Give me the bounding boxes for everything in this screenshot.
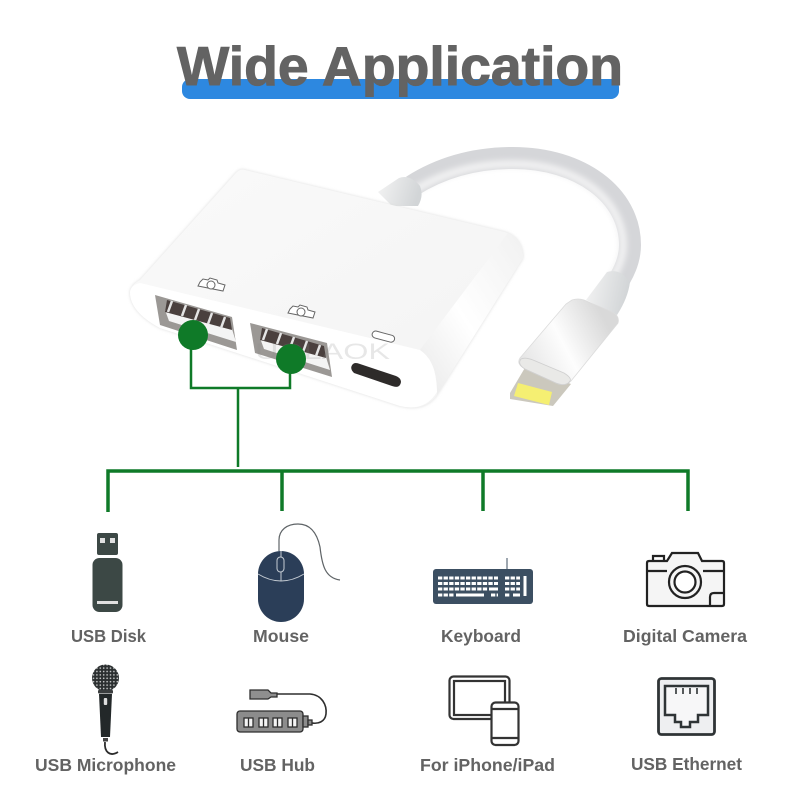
title underline bar: [182, 79, 619, 99]
adapter side face: [420, 233, 523, 395]
icon: microphone: [92, 664, 119, 754]
cable strain relief at body: [378, 177, 422, 206]
lightning connector head: [519, 299, 618, 385]
icon: keyboard: [433, 558, 533, 604]
label: Mouse: Mouse: [253, 626, 309, 646]
cable strain relief at connector: [586, 271, 630, 315]
title: [177, 35, 623, 99]
adapter front face: [130, 283, 437, 407]
lightning plug: [510, 366, 571, 406]
watermark: UGLAOK: [255, 339, 390, 364]
icon: USB hub: [237, 690, 326, 732]
adapter product photo: [130, 158, 630, 408]
USB port 1: [155, 295, 237, 350]
label: Digital Camera: Digital Camera: [623, 626, 747, 646]
label: USB Hub: USB Hub: [240, 755, 315, 775]
connector dot right: [276, 344, 306, 374]
lightning connector mouth: [520, 358, 570, 385]
icon: digital camera: [647, 553, 724, 606]
label: USB Microphone: USB Microphone: [35, 755, 176, 775]
label: USB Disk: USB Disk: [71, 626, 146, 646]
charging port: [351, 363, 401, 387]
title text: Wide Application: [177, 35, 623, 97]
adapter body soft edge: [130, 170, 523, 408]
camera port icons: [198, 278, 315, 318]
charging port label: [371, 330, 395, 343]
icon: iPhone and iPad: [450, 676, 518, 745]
icon: mouse: [258, 524, 340, 622]
adapter body: [130, 170, 523, 408]
connector dot left: [178, 320, 208, 350]
green connector lines: [108, 320, 688, 512]
label: For iPhone/iPad: For iPhone/iPad: [420, 755, 555, 775]
icon: USB disk: [92, 533, 122, 612]
label: USB Ethernet: USB Ethernet: [631, 754, 742, 774]
icon: USB Ethernet port: [658, 678, 714, 734]
label: Keyboard: Keyboard: [441, 626, 521, 646]
USB port 2: [250, 323, 332, 377]
cable: [412, 158, 630, 290]
